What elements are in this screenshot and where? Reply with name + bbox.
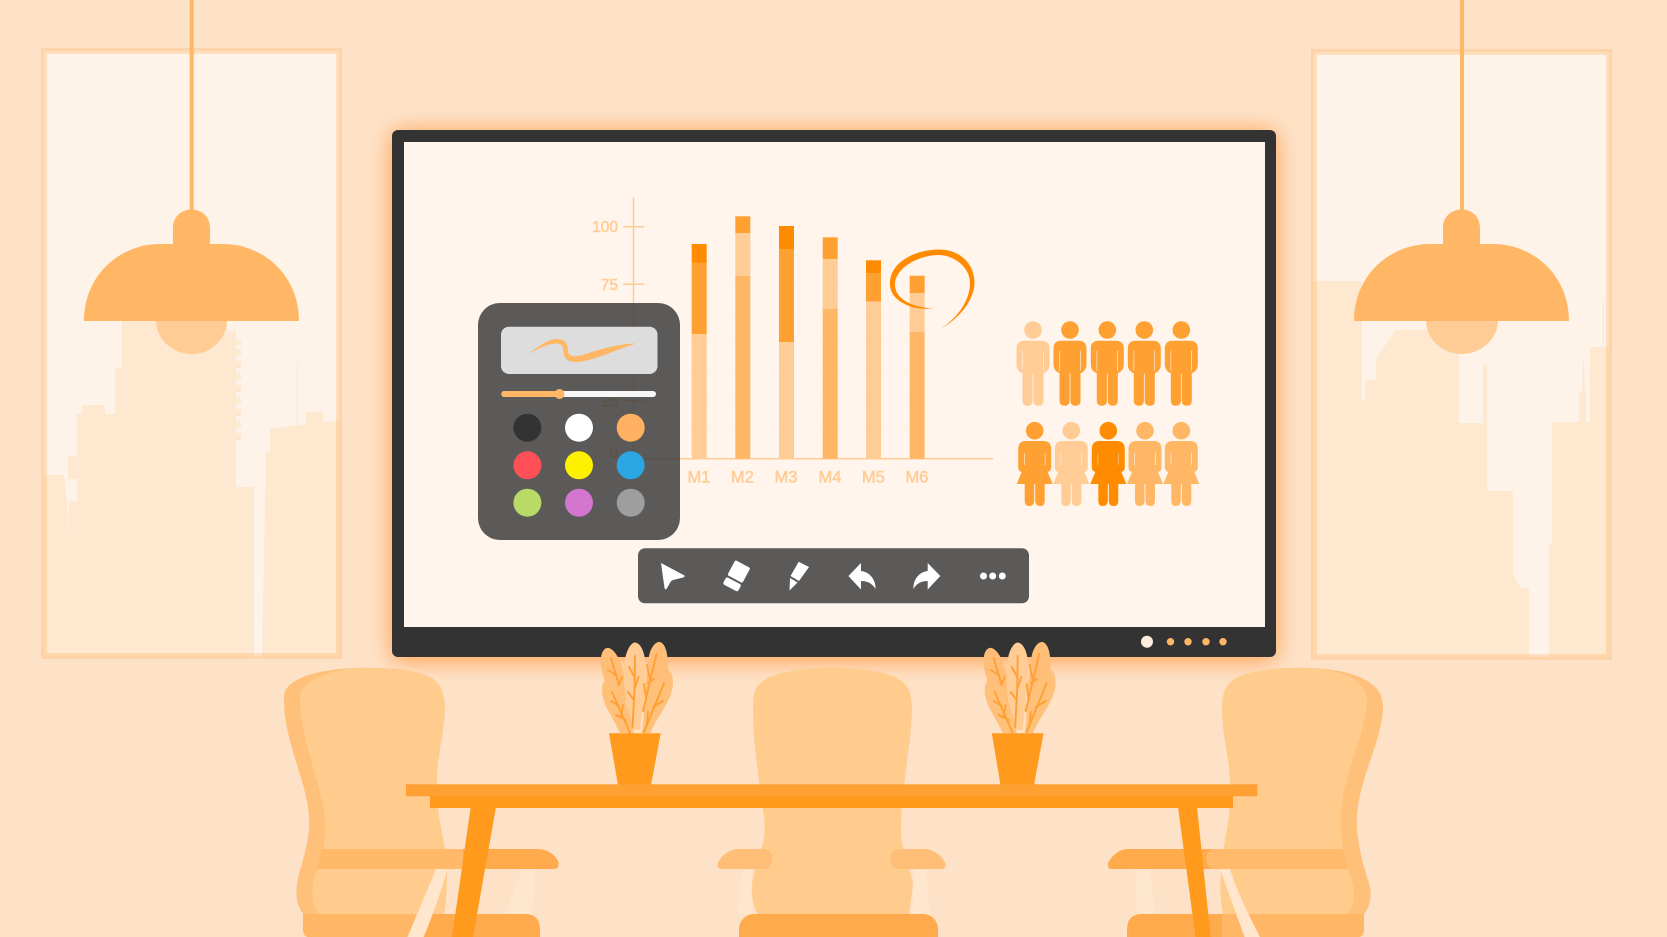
right window <box>1314 52 1609 657</box>
x axis labels: M6 <box>906 469 928 487</box>
icon: pen <box>790 562 809 590</box>
x axis labels: M5 <box>862 469 885 487</box>
chart axes <box>623 197 993 459</box>
left table leg <box>452 807 496 937</box>
right chair <box>1108 668 1383 937</box>
icon: more <box>980 572 1006 580</box>
stroke preview <box>501 327 658 374</box>
y axis labels: 25 <box>601 394 618 410</box>
colour swatches <box>513 414 645 517</box>
y axis labels: 0 <box>609 445 618 462</box>
y axis labels <box>592 219 618 462</box>
bar M5 <box>866 260 881 459</box>
annotation toolbar <box>638 548 1029 603</box>
left potted plant <box>601 642 673 785</box>
bar M1 <box>692 244 707 459</box>
right potted plant <box>984 642 1056 785</box>
y axis labels: 75 <box>601 277 618 294</box>
y axis labels: 100 <box>592 219 618 236</box>
middle chair <box>717 668 946 937</box>
table <box>406 784 1257 937</box>
monitor <box>392 130 1276 657</box>
bar M3 <box>779 226 794 459</box>
icon: redo <box>913 563 940 590</box>
right pot <box>992 733 1044 785</box>
icon: undo <box>848 563 876 590</box>
right pendant lamp <box>1354 0 1569 354</box>
x axis labels: M4 <box>819 469 841 487</box>
pictogram: men row <box>1016 321 1198 406</box>
right table leg <box>1178 807 1211 937</box>
x axis labels: M1 <box>688 469 710 487</box>
x axis labels <box>688 469 928 487</box>
right window frame <box>1314 52 1609 657</box>
monitor glow <box>392 132 1276 660</box>
x axis labels: M2 <box>731 469 754 487</box>
stroke width slider <box>501 389 656 399</box>
status lights <box>1141 636 1227 648</box>
bar M2 <box>735 216 750 459</box>
y axis labels: 50 <box>601 335 618 352</box>
left chair <box>284 668 559 937</box>
left pot <box>609 733 661 785</box>
pen settings panel <box>478 303 680 540</box>
stacked bar chart <box>592 197 993 487</box>
bar M4 <box>823 237 838 459</box>
bar M6 <box>910 276 925 459</box>
icon: pointer <box>661 563 685 589</box>
left window <box>44 51 339 659</box>
monitor screen <box>404 142 1265 627</box>
icon: eraser <box>723 560 750 592</box>
left pendant lamp <box>84 0 299 354</box>
left window frame <box>44 51 339 656</box>
pictogram: women row <box>1017 422 1199 506</box>
x axis labels: M3 <box>775 469 797 487</box>
hand-drawn circle annotation <box>890 249 975 329</box>
